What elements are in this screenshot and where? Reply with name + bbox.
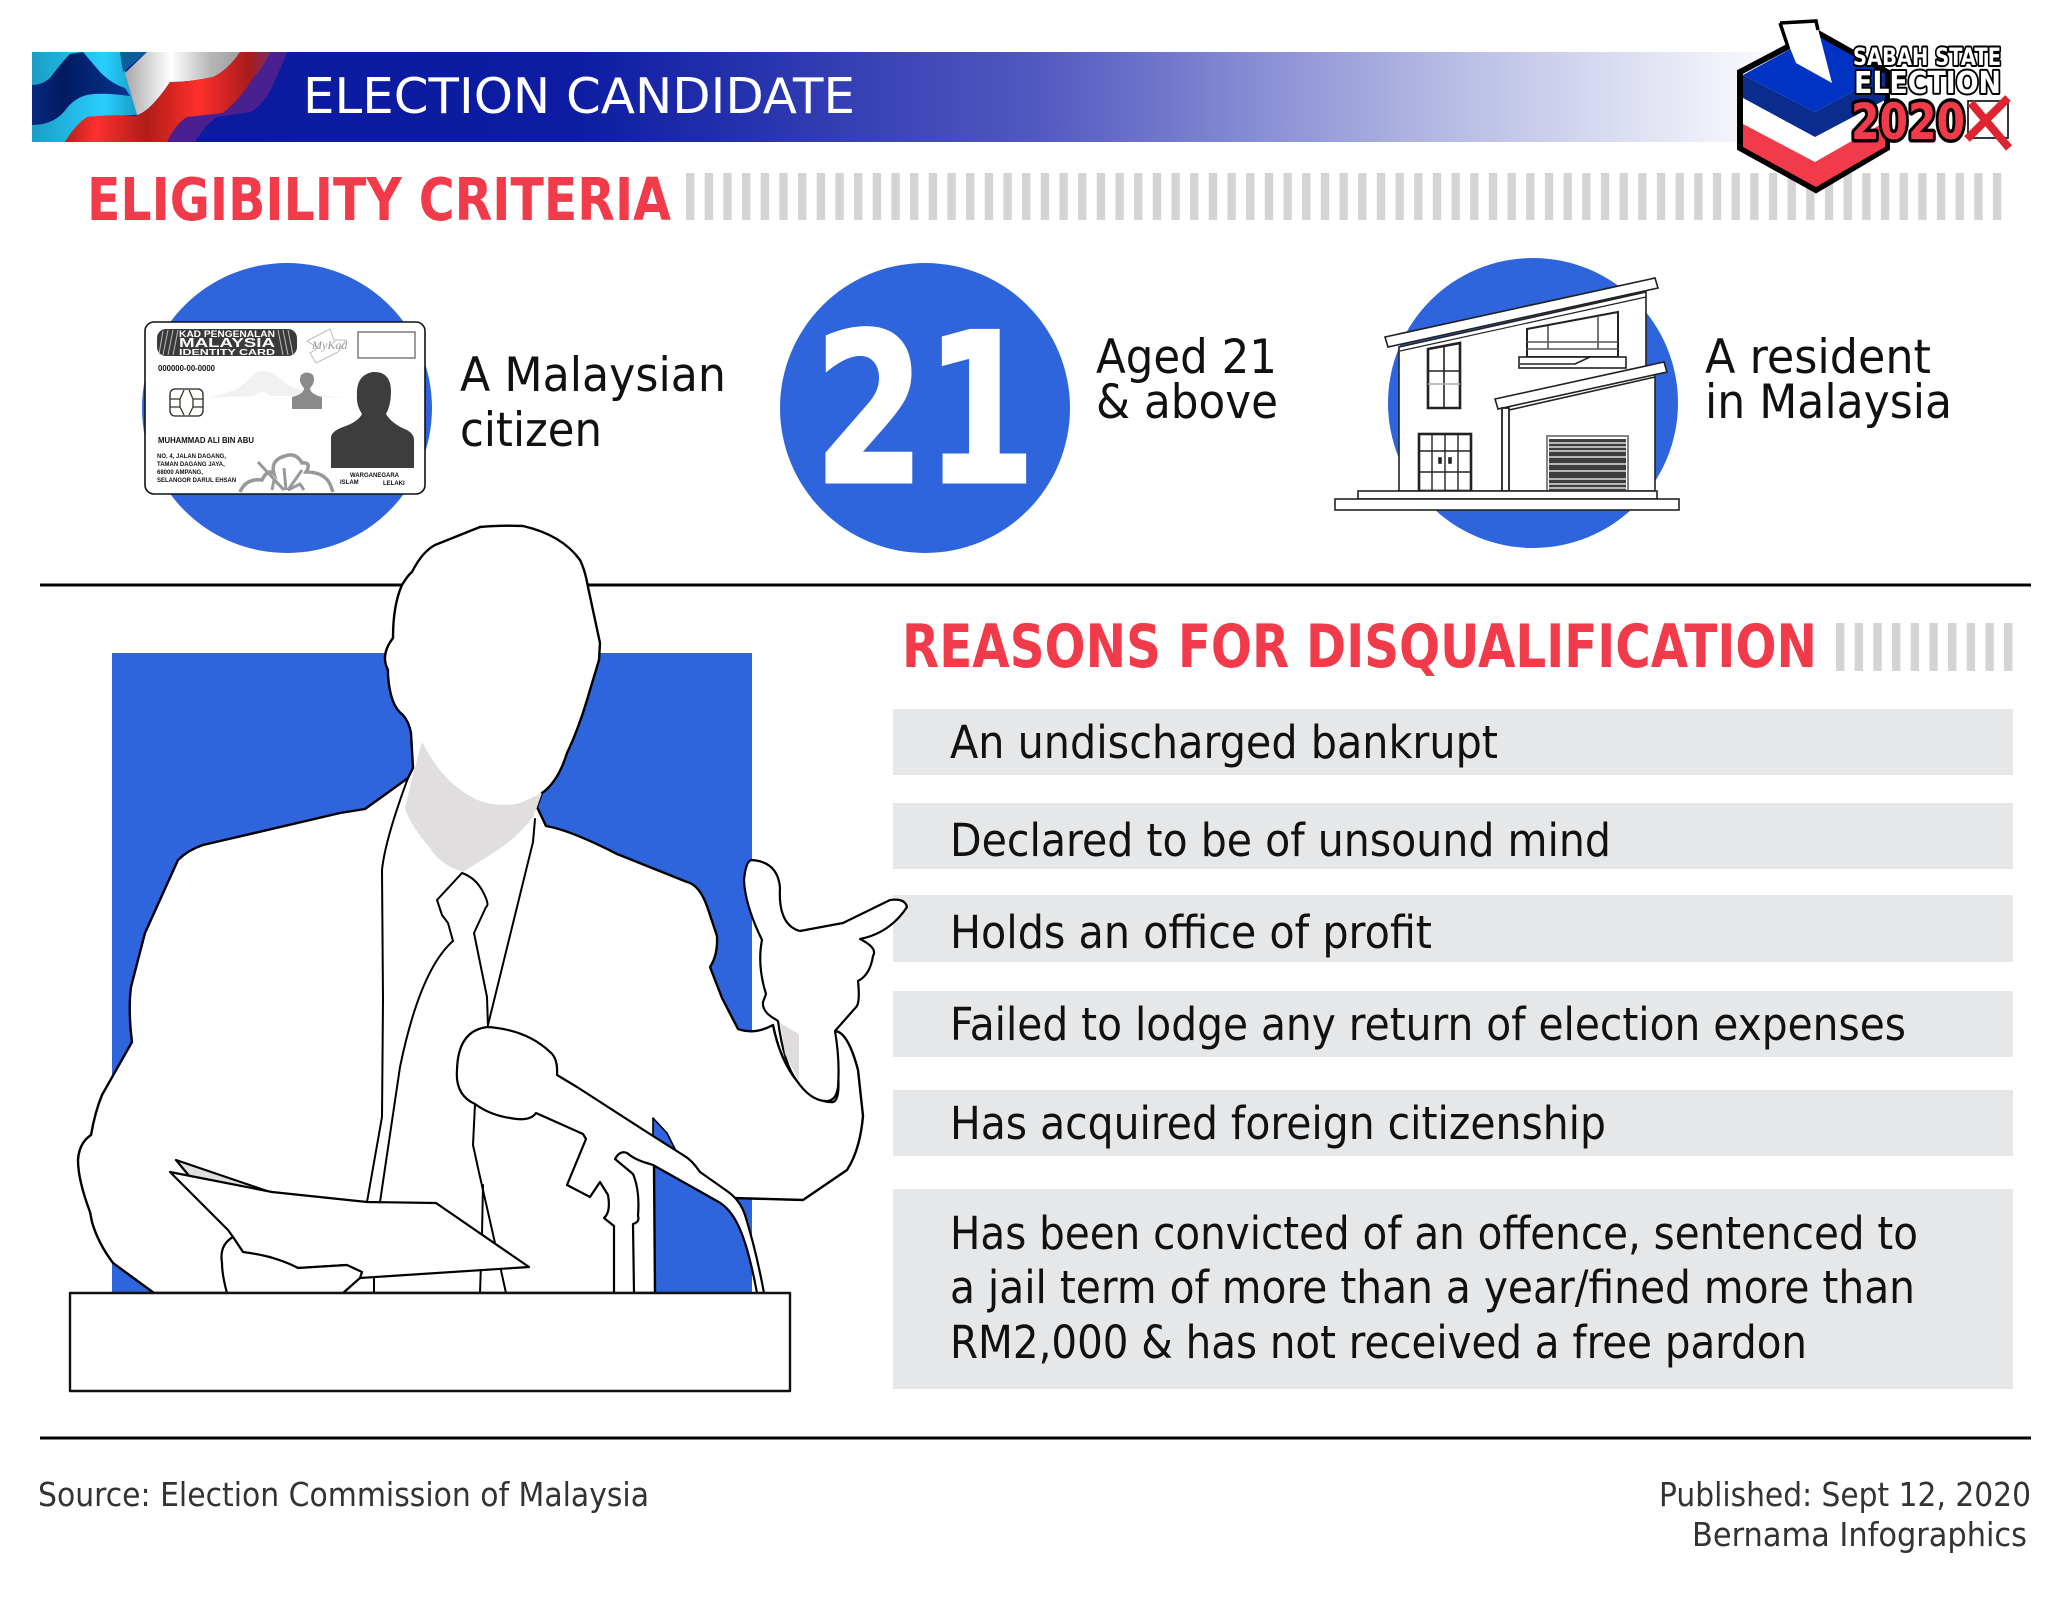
reason 6: RM2,000 & has not received a free pardon <box>950 1316 1807 1369</box>
holding hand <box>221 1237 362 1293</box>
eligibility item: age <box>780 263 1278 553</box>
reason 6: a jail term of more than a year/fined more than <box>950 1261 1915 1314</box>
label: a Malaysian citizen <box>460 348 726 458</box>
man silhouette <box>78 526 863 1293</box>
heading: reasons for disqualification: REASONS FOR DISQUALIFICATION <box>902 612 1817 682</box>
reason 6: Has been convicted of an offence, sentenced to <box>950 1207 1918 1260</box>
neck shadow <box>405 742 542 872</box>
icon: identity card: KAD PENGENALAN <box>179 329 275 339</box>
logo text: SABAH STATE <box>1853 43 2001 71</box>
illustration: candidate speaking at podium <box>70 526 907 1391</box>
reason 2: Declared to be of unsound mind <box>950 814 1611 867</box>
cuff shadow <box>780 1023 799 1081</box>
pointing hand <box>744 860 907 1101</box>
label: aged 21 and above <box>1096 330 1278 430</box>
eligibility item: resident <box>1335 258 1952 548</box>
label: aged 21 and above: & above <box>1096 375 1278 430</box>
icon: flag ribbon <box>32 52 287 142</box>
heading: eligibility criteria: ELIGIBILITY CRITERIA <box>87 165 671 234</box>
logo text <box>1851 43 2001 151</box>
icon: identity card: MyKad <box>311 338 348 352</box>
icon: identity card: IDENTITY CARD <box>179 348 275 357</box>
reason 3: Holds an office of profit <box>950 906 1432 959</box>
icon: identity card: 68000 AMPANG, <box>157 470 203 476</box>
icon: marked voting box <box>1967 98 2009 148</box>
label: aged 21 and above: Aged 21 <box>1096 330 1277 385</box>
icon: identity card: 000000-00-0000 <box>158 363 215 373</box>
jacket and tie lines <box>367 778 535 1293</box>
publication note <box>1659 1475 2031 1554</box>
microphone <box>457 1027 764 1293</box>
reason 6 <box>893 1189 2013 1389</box>
paper sheets <box>170 1160 529 1278</box>
icon: identity card: TAMAN DAGANG JAYA, <box>157 462 225 468</box>
label: a Malaysian citizen: citizen <box>460 403 602 458</box>
publication note: Bernama Infographics <box>1692 1515 2027 1554</box>
icon: identity card <box>145 322 425 494</box>
blue backdrop <box>112 653 752 1293</box>
logo text: ELECTION <box>1854 66 2001 101</box>
icon: identity card: MALAYSIA <box>179 335 276 350</box>
icon: house <box>1335 278 1679 510</box>
label: a resident in Malaysia: in Malaysia <box>1705 375 1952 430</box>
eligibility item: citizen <box>142 263 726 553</box>
icon: identity card: SELANGOR DARUL EHSAN <box>157 478 236 484</box>
heading: eligibility criteria <box>87 165 2009 234</box>
label: a resident in Malaysia <box>1705 330 1952 430</box>
reason 5 <box>893 1090 2013 1156</box>
eligibility item: age: 21 <box>814 290 1036 532</box>
banner title: ELECTION CANDIDATE <box>303 68 855 125</box>
reason 2 <box>893 803 2013 869</box>
list of disqualification reasons <box>893 709 2013 1389</box>
icon: identity card: NO. 4, JALAN DAGANG, <box>157 454 226 460</box>
podium <box>70 1293 790 1391</box>
logo: Sabah State Election 2020 <box>1740 21 2009 190</box>
icon: identity card: LELAKI <box>383 481 405 487</box>
icon: identity card: ISLAM <box>340 480 359 486</box>
icon: ballot box <box>1740 21 1887 190</box>
header banner <box>32 52 1792 142</box>
blue gap behind microphone <box>653 1118 677 1153</box>
logo text: 2020 <box>1851 93 1965 151</box>
reason 1: An undischarged bankrupt <box>950 716 1498 769</box>
reason 4: Failed to lodge any return of election expenses <box>950 998 1906 1051</box>
reason 5: Has acquired foreign citizenship <box>950 1097 1606 1150</box>
label: a Malaysian citizen: A Malaysian <box>460 348 726 403</box>
reason 3 <box>893 895 2013 962</box>
publication note: Published: Sept 12, 2020 <box>1659 1475 2031 1514</box>
label: a resident in Malaysia: A resident <box>1705 330 1931 385</box>
icon: identity card: MUHAMMAD ALI BIN ABU <box>158 435 254 445</box>
icon: card chip <box>170 389 203 416</box>
source note: Source: Election Commission of Malaysia <box>38 1475 649 1514</box>
icon: identity card: WARGANEGARA <box>350 473 400 479</box>
reason 1 <box>893 709 2013 775</box>
